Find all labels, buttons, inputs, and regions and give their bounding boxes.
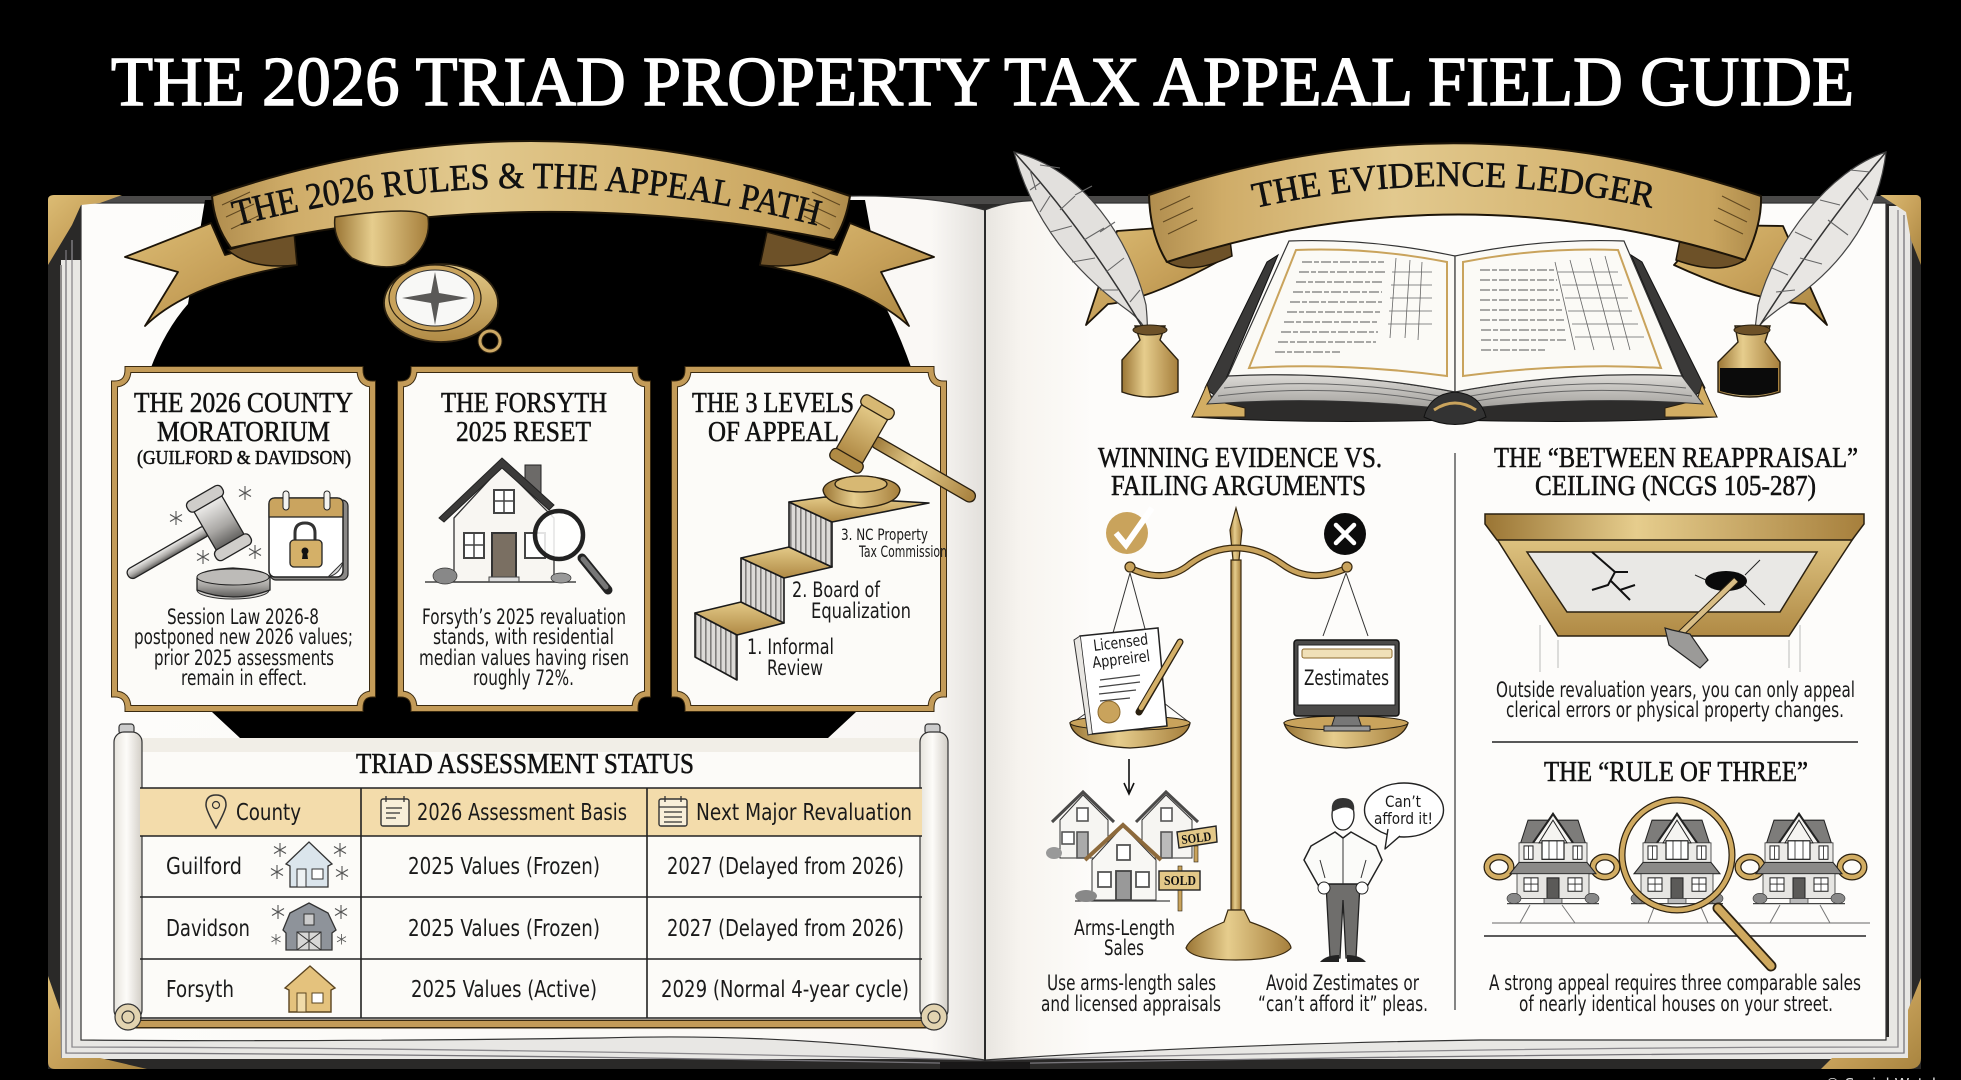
sold signs: SOLD [1164,873,1196,888]
divider [1454,453,1456,1010]
step labels: Equalization [811,599,911,623]
icon: compass [335,211,500,351]
banner: the 2026 rules and the appeal path [124,140,935,327]
page edges [61,206,1911,1064]
heading: between reappraisal ceiling [1494,442,1858,502]
heading: winning evidence vs failing arguments [1098,442,1382,502]
row: davidson: 2027 (Delayed from 2026) [667,916,904,942]
scroll bottom gold edge [128,1020,934,1028]
scroll title: TRIAD ASSESSMENT STATUS [356,748,694,780]
zestimates monitor: Zestimates [1304,666,1389,690]
speech bubble: Can’t [1385,792,1421,811]
card heading: THE FORSYTH [441,387,607,419]
heading: between reappraisal ceiling: THE “BETWEEN REAPPRAISAL” [1494,442,1858,474]
icon: cracked ceiling and hammer [1485,514,1864,672]
icon: person with empty pockets [1304,798,1382,962]
panel: triad assessment status scroll [114,724,948,1030]
spine clasp [1424,392,1486,424]
icon: gold gavel [823,393,993,531]
heading: rule of three: THE “RULE OF THREE” [1544,756,1808,788]
row: davidson: Davidson [166,916,250,942]
row: davidson: 2025 Values (Frozen) [408,916,600,942]
banner text [236,188,819,226]
icon: house with magnifier [425,458,608,590]
panel: forsyth 2025 reset card [400,370,648,708]
arrow [1124,759,1134,794]
card heading: (GUILFORD & DAVIDSON) [137,447,351,469]
speech bubble [1364,783,1444,849]
row: forsyth [166,966,909,1012]
staircase [695,497,929,680]
step labels: 1. Informal [747,635,834,659]
caption: avoid zestimates [1258,971,1428,1016]
caption: outside revaluation years [1496,678,1855,722]
icon: right feather and inkwell [1718,152,1886,397]
caption: use arms-length sales: and licensed appraisals [1041,992,1221,1016]
caption: use arms-length sales [1041,971,1221,1016]
panel: 3 levels of appeal card [674,370,993,708]
left open page [1228,241,1455,392]
card body text: remain in effect. [181,666,307,690]
icon: x mark [1324,513,1366,555]
row: forsyth: 2029 (Normal 4-year cycle) [661,977,909,1003]
sold signs: SOLD [1181,828,1212,847]
card heading [441,387,607,448]
card body text [134,605,353,690]
row: guilford: 2025 Values (Frozen) [408,854,600,880]
caption: a strong appeal [1489,971,1861,1016]
step labels: Tax Commission [858,542,947,561]
card heading: 2025 RESET [456,416,591,448]
row: guilford [166,842,904,887]
magnifier [1622,800,1771,966]
card body text: stands, with residential [433,625,614,649]
caption: a strong appeal: of nearly identical houses on your street. [1519,992,1833,1016]
card body text: Forsyth’s 2025 revaluation [422,605,626,629]
licensed appraisal document: Licensed [1092,630,1149,655]
heading: winning evidence vs failing arguments: WINNING EVIDENCE VS. [1098,442,1382,474]
row: davidson [166,903,904,950]
card heading: THE 3 LEVELS [692,387,854,419]
icon: locked calendar [269,491,348,580]
card body text: roughly 72%. [473,666,574,690]
table header: Next Major Revaluation [696,800,912,826]
icon: left feather and inkwell [1014,152,1178,397]
balance scale [1070,508,1408,960]
step labels: 3. NC Property [841,525,928,544]
status table [140,788,922,1018]
gold corner: top right [1880,195,1921,265]
step labels [747,525,947,680]
left page [81,196,985,1060]
panel: county moratorium card [111,370,373,708]
label: arms-length sales [1074,916,1175,960]
gold corner: top left [48,195,122,265]
comparable houses [1507,813,1599,904]
licensed appraisal document [1074,628,1180,735]
caption: avoid zestimates: Avoid Zestimates or [1266,971,1419,995]
card heading: OF APPEAL [708,416,839,448]
table header: County [236,800,301,826]
step labels: 2. Board of [792,578,880,602]
caption: outside revaluation years: clerical errors or physical property changes. [1506,698,1844,722]
icon: sold houses [1046,792,1217,911]
caption: avoid zestimates: “can’t afford it” pleas. [1258,992,1428,1016]
licensed appraisal document: Appreirel [1091,647,1151,672]
icon: frozen gavel [111,484,270,605]
right pan [1284,573,1408,748]
banner: the evidence ledger [1085,142,1828,326]
icon: open ledger book [1192,241,1717,424]
card body text: median values having risen [419,646,629,670]
card body text: prior 2025 assessments [154,646,334,670]
step labels: Review [767,656,823,680]
card heading [692,387,854,448]
heading: between reappraisal ceiling: CEILING (NCGS 105-287) [1535,470,1816,502]
card heading: MORATORIUM [157,416,330,448]
card heading: THE 2026 COUNTY [134,387,353,419]
spine [984,208,986,1062]
right open page [1455,241,1682,392]
row: forsyth: Forsyth [166,977,234,1003]
caption: use arms-length sales: Use arms-length sales [1047,971,1216,995]
card heading [134,387,353,469]
title: THE 2026 TRIAD PROPERTY TAX APPEAL FIELD GUIDE [111,44,1854,121]
table header [206,795,912,828]
sold signs [1159,826,1217,911]
card body text: postponed new 2026 values; [134,625,353,649]
left pan [1070,573,1190,748]
banner text [1255,186,1652,208]
page blocks [1207,374,1455,410]
speech bubble: afford it! [1374,809,1433,828]
card body text [419,605,629,690]
icon: check mark [1106,508,1152,554]
banner: the evidence ledger: THE EVIDENCE LEDGER [1250,162,1652,208]
zestimates monitor [1294,640,1399,731]
gold corner: bottom left [48,976,147,1069]
right page [985,200,1886,1060]
ledger lines [1275,262,1385,352]
table header: 2026 Assessment Basis [417,800,627,826]
banner: the 2026 rules and the appeal path: THE 2026 RULES & THE APPEAL PATH [230,163,823,226]
heading: winning evidence vs failing arguments: FAILING ARGUMENTS [1111,470,1366,502]
open book [48,195,1921,1069]
scroll rolls [114,724,948,1030]
row: guilford: 2027 (Delayed from 2026) [667,854,904,880]
row: forsyth: 2025 Values (Active) [411,977,597,1003]
row: guilford: Guilford [166,854,242,880]
cover [1192,396,1717,421]
black arch behind cards [150,200,912,738]
scale column and base [1125,508,1352,960]
label: arms-length sales: Sales [1104,936,1144,960]
label: arms-length sales: Arms-Length [1074,916,1175,940]
chain links [1487,857,1511,877]
illustration: three houses, chain and magnifier [1484,800,1870,966]
book cover [48,197,1921,1069]
card body text: Session Law 2026-8 [167,605,319,629]
gold corner: bottom right [1821,978,1921,1069]
